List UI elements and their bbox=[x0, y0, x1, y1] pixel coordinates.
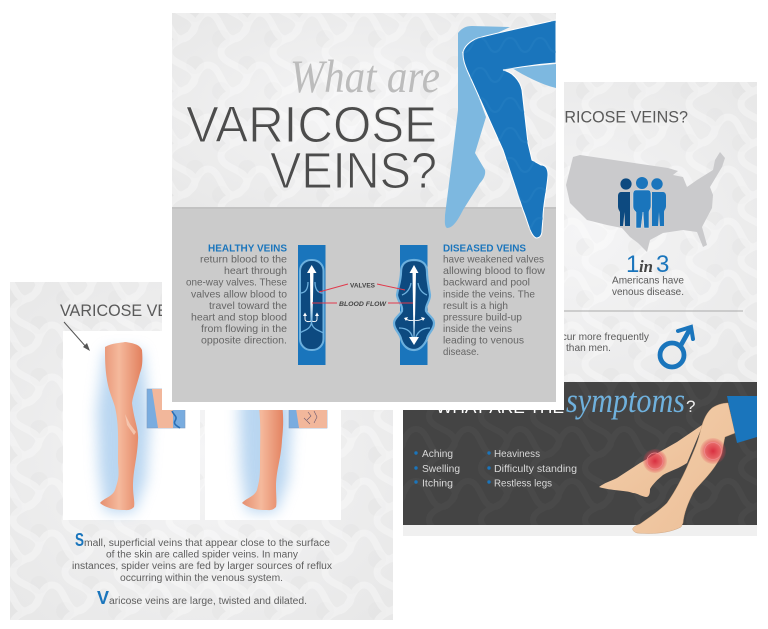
text block: Americans have venous disease bbox=[612, 274, 684, 298]
heading: what are the symptoms: symptoms bbox=[566, 381, 685, 420]
text block: healthy veins: heart and stop blood bbox=[191, 312, 287, 324]
text block: diseased veins: result is a high bbox=[443, 300, 508, 312]
list: symptoms column two: Difficulty standing bbox=[494, 463, 577, 475]
text block: healthy veins: heart through bbox=[224, 265, 287, 277]
stat: 1 in 3: 3 bbox=[656, 251, 669, 278]
panel: center, what are varicose veins bbox=[162, 3, 564, 410]
text block: healthy veins: return blood to the bbox=[200, 254, 287, 266]
text block: diseased veins: pressure build-up bbox=[443, 312, 522, 324]
arrow: pointer to leg bbox=[64, 322, 90, 351]
inset: spider veins detail bbox=[289, 389, 327, 428]
text block: Americans have venous disease: Americans have bbox=[612, 274, 684, 286]
text block: diseased veins: allowing blood to flow bbox=[443, 265, 545, 277]
inset: bulging veins detail bbox=[147, 389, 185, 428]
panel: symptoms bbox=[403, 381, 757, 536]
text block: healthy veins: opposite direction. bbox=[201, 334, 287, 346]
text block: diseased veins: leading to venous bbox=[443, 334, 524, 346]
text block: spider veins: of the skin are called spider veins. In many bbox=[106, 550, 298, 561]
text block: healthy veins: one-way valves. These bbox=[186, 277, 287, 289]
list: symptoms column one: Itching bbox=[422, 478, 453, 490]
text block: diseased veins: disease. bbox=[443, 346, 479, 358]
text block: occurs more frequently: occur more frequently bbox=[551, 331, 650, 343]
text block: Americans have venous disease: venous disease. bbox=[612, 286, 684, 298]
callout: valves and blood flow labels: BLOOD FLOW bbox=[339, 301, 387, 308]
text block: healthy veins: HEALTHY VEINS bbox=[208, 242, 287, 254]
text block: healthy veins: travel toward the bbox=[209, 300, 287, 312]
illustration: legs with pain points bbox=[599, 396, 757, 533]
panel: right, statistics bbox=[564, 82, 757, 382]
callout: valves and blood flow labels: VALVES bbox=[350, 284, 375, 290]
image card: right leg bbox=[205, 410, 341, 520]
text block: varicose veins definition bbox=[97, 588, 307, 608]
pain point: upper leg bbox=[700, 438, 726, 464]
map: United States bbox=[566, 152, 725, 252]
text block: diseased veins: backward and pool bbox=[443, 277, 530, 289]
text block: diseased veins: inside the veins bbox=[443, 323, 512, 335]
text block: diseased veins: DISEASED VEINS bbox=[443, 242, 526, 254]
title: varicose: VARICOSE bbox=[186, 96, 437, 153]
panel: left, spider and varicose veins bbox=[10, 282, 393, 620]
pain point: lower leg bbox=[643, 449, 667, 473]
text block: occurs more frequently: than men. bbox=[566, 342, 611, 354]
text block: varicose veins definition: aricose veins are large, twisted and dilated. bbox=[109, 596, 307, 607]
text block: spider veins bbox=[72, 530, 332, 584]
heading: what are the symptoms: ? bbox=[686, 397, 695, 416]
text block: healthy veins bbox=[186, 242, 287, 346]
text block: occurs more frequently bbox=[551, 331, 650, 354]
list: symptoms column two: Heaviness bbox=[494, 448, 540, 460]
diagram: healthy vein bbox=[298, 245, 326, 365]
text block: spider veins: instances, spider veins are fed by larger sources of reflux bbox=[72, 561, 332, 572]
text block: spider veins: mall, superficial veins that appear close to the surface bbox=[84, 538, 330, 549]
text block: spider veins: occurring within the venous system. bbox=[120, 573, 283, 584]
text block: diseased veins: inside the veins. The bbox=[443, 288, 535, 300]
panel heading: varicose veins: VARICOSE VEINS? bbox=[544, 108, 688, 126]
image card: left leg bbox=[63, 331, 200, 520]
title: veins: VEINS? bbox=[270, 142, 437, 199]
diagram: diseased vein bbox=[394, 245, 434, 365]
stat: 1 in 3: 1 bbox=[626, 251, 639, 278]
text block: healthy veins: valves allow blood to bbox=[191, 288, 287, 300]
text block: diseased veins bbox=[443, 242, 545, 358]
stat: 1 in 3 bbox=[626, 251, 669, 278]
heading: what are the symptoms: WHAT ARE THE bbox=[436, 398, 564, 417]
heading: what are the symptoms bbox=[436, 381, 695, 420]
panel heading: varicose veins: VARICOSE VEINS? bbox=[60, 301, 204, 320]
list: symptoms column one: Swelling bbox=[422, 463, 460, 475]
stat: 1 in 3: in bbox=[639, 257, 653, 276]
title: what are: What are bbox=[290, 51, 440, 103]
text block: spider veins: S bbox=[75, 530, 84, 550]
text block: diseased veins: have weakened valves bbox=[443, 254, 544, 266]
text block: varicose veins definition: V bbox=[97, 588, 109, 608]
list: symptoms column one: Aching bbox=[422, 448, 453, 460]
list: symptoms column two: Restless legs bbox=[494, 478, 552, 490]
list: symptoms column one bbox=[414, 448, 460, 490]
icon: three people bbox=[618, 177, 666, 228]
skirt bbox=[727, 396, 757, 443]
list: symptoms column two bbox=[487, 448, 577, 490]
text block: healthy veins: from flowing in the bbox=[201, 323, 287, 335]
illustration: blue legs silhouette bbox=[445, 20, 556, 238]
callout: valves and blood flow labels bbox=[312, 284, 413, 308]
icon: male symbol bbox=[660, 327, 693, 367]
